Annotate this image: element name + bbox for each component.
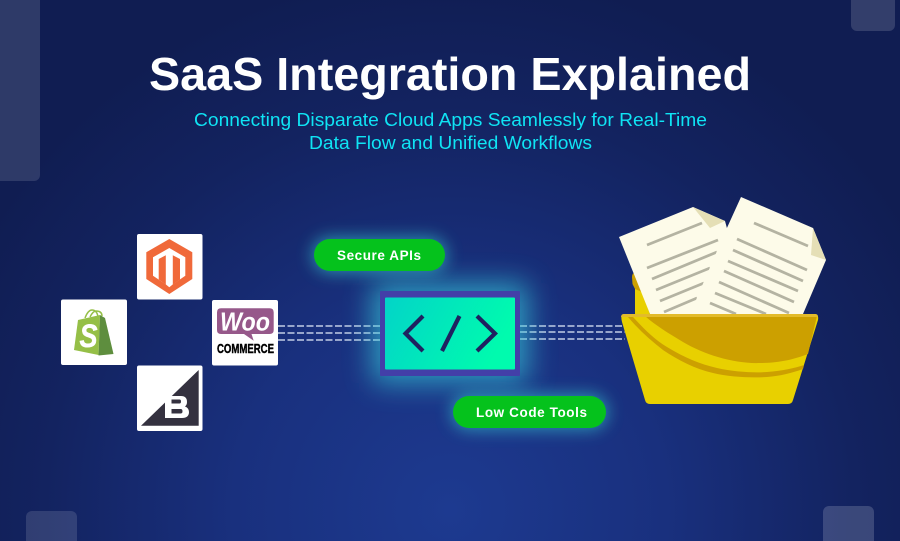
subtitle	[194, 110, 707, 153]
document left	[619, 207, 728, 314]
title: SaaS Integration Explained	[149, 48, 751, 100]
pill: Low Code Tools: Low Code Tools	[476, 405, 587, 420]
pill: Secure APIs: Secure APIs	[337, 248, 421, 263]
icon: folder with documents	[619, 197, 826, 404]
glow behind pills and code block	[312, 237, 608, 430]
pill: Secure APIs	[314, 239, 445, 271]
icon: WooCommerce tile: COMMERCE	[217, 342, 274, 356]
folder back	[635, 288, 650, 314]
icon: BigCommerce tile	[137, 366, 202, 431]
pill: Low Code Tools	[453, 396, 606, 428]
icon: WooCommerce tile	[212, 300, 278, 366]
icon: Shopify tile: S	[80, 318, 98, 354]
subtitle: Connecting Disparate Cloud Apps Seamlessly for Real-Time	[194, 110, 707, 130]
code block icon	[380, 291, 520, 376]
icon: WooCommerce tile: Woo	[220, 306, 270, 336]
folder front	[621, 314, 818, 404]
icon: Magento tile	[137, 234, 202, 300]
connector lines: WooCommerce to code block	[278, 326, 380, 340]
connector lines: code block to folder	[520, 326, 625, 339]
document right	[690, 197, 826, 314]
icon: Shopify tile	[61, 300, 127, 365]
subtitle: Data Flow and Unified Workflows	[309, 133, 592, 153]
